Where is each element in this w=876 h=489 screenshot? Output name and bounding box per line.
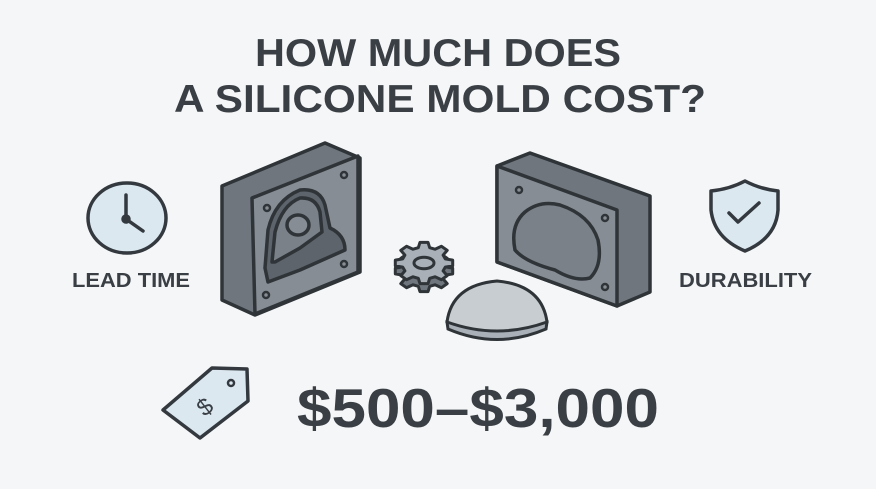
icon: price tag: $ <box>192 393 219 422</box>
title <box>174 32 706 121</box>
left mold <box>222 143 360 315</box>
title: HOW MUCH DOES <box>255 32 621 75</box>
label: lead time: LEAD TIME <box>72 270 190 292</box>
icon: shield <box>711 181 778 251</box>
right mold <box>497 153 650 306</box>
dome <box>447 281 547 340</box>
icon: clock <box>88 183 166 253</box>
gear <box>395 242 453 292</box>
price: $500–$3,000 <box>297 377 659 439</box>
label: durability: DURABILITY <box>679 270 813 292</box>
title: A SILICONE MOLD COST? <box>174 78 706 121</box>
icon: price tag <box>163 368 248 438</box>
